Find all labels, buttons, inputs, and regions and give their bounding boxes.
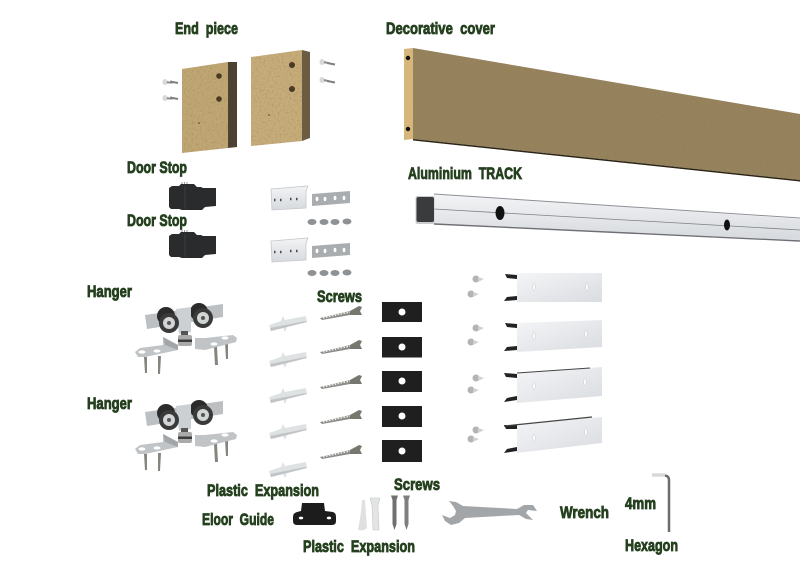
hanger 2 bbox=[135, 400, 237, 471]
door stop 2 bbox=[169, 230, 216, 258]
label: door stop 2: Door Stop bbox=[127, 211, 187, 230]
heading: decorative cover: Decorative cover bbox=[386, 19, 495, 38]
label: floor guide: Eloor Guide bbox=[202, 510, 274, 529]
decorative cover board bbox=[404, 48, 800, 182]
label: screws 2: Screws bbox=[394, 475, 440, 494]
label: hexagon: Hexagon bbox=[625, 536, 678, 555]
plastic expansion anchors column bbox=[269, 316, 307, 478]
aluminium track bbox=[416, 194, 800, 241]
icon: hex key bbox=[652, 475, 669, 532]
end piece: right block with screws bbox=[251, 50, 335, 146]
icon: wrench bbox=[442, 501, 537, 525]
screws column bbox=[320, 306, 362, 459]
rail clip 4 bbox=[504, 417, 602, 453]
label: plastic expansion 1: Plastic Expansion bbox=[207, 481, 319, 500]
label: wrench: Wrench bbox=[560, 503, 609, 522]
floor guide bbox=[293, 503, 336, 525]
heading: aluminium track: Aluminium TRACK bbox=[408, 164, 523, 183]
label: 4mm: 4mm bbox=[625, 494, 656, 513]
label: hanger 1: Hanger bbox=[87, 282, 132, 301]
end piece: left block with screws bbox=[162, 62, 237, 153]
screws pair bbox=[391, 496, 410, 530]
black square spacers column bbox=[382, 302, 422, 462]
rail clip 1 bbox=[504, 273, 602, 302]
rail clip 3 bbox=[504, 367, 602, 403]
small screws for rail clips bbox=[468, 276, 484, 442]
door stop 1 bbox=[169, 182, 216, 210]
connector set 1 bbox=[271, 186, 352, 225]
hanger 1 bbox=[135, 303, 237, 374]
label: hanger 2: Hanger bbox=[87, 394, 132, 413]
label: screws: Screws bbox=[317, 287, 362, 306]
label: plastic expansion 2: Plastic Expansion bbox=[303, 537, 415, 556]
rail clip 2 bbox=[504, 320, 602, 352]
connector set 2 bbox=[271, 238, 352, 276]
plastic expansion anchors pair bbox=[358, 498, 380, 530]
heading: end piece: End piece bbox=[175, 19, 238, 38]
label: door stop 1: Door Stop bbox=[127, 158, 187, 177]
